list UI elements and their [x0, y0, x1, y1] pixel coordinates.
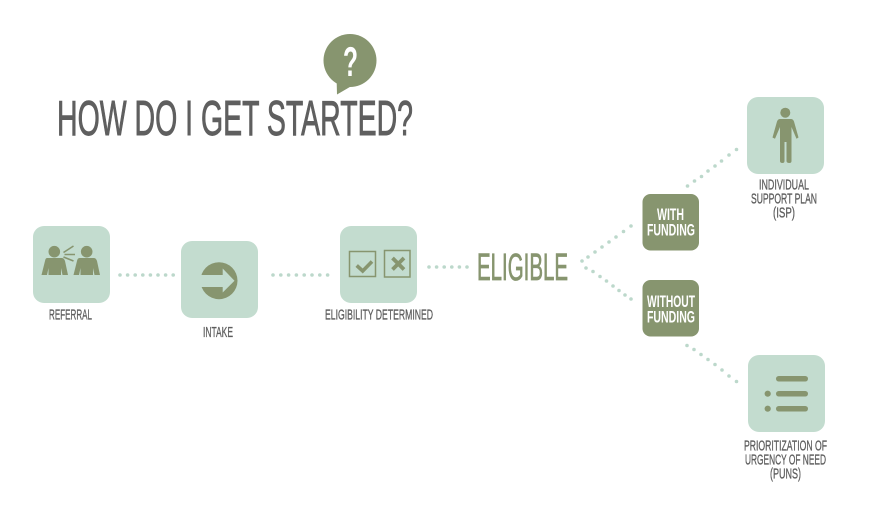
label: individual support plan: (ISP) [773, 206, 795, 222]
dotted connector: intake to eligibility [271, 273, 329, 277]
step: eligibility determined [325, 226, 433, 324]
dotted connector: referral to intake [118, 273, 175, 277]
title: HOW DO I GET STARTED? [57, 92, 413, 146]
label: individual support plan: INDIVIDUAL [759, 178, 809, 194]
step: individual support plan [747, 97, 824, 222]
box: without funding: FUNDING [647, 308, 695, 326]
step: prioritization of urgency of need [744, 355, 827, 482]
icon: question speech bubble: ? [343, 38, 358, 85]
icon: two people talking [42, 246, 100, 275]
icon: check box and cross box [350, 250, 410, 277]
step: referral [33, 226, 110, 324]
box: with funding: WITH [657, 206, 684, 224]
dotted connector: eligible to with funding [580, 224, 633, 263]
label: intake: INTAKE [203, 325, 233, 341]
heading: eligible: ELIGIBLE [477, 247, 568, 289]
label: individual support plan: SUPPORT PLAN [751, 192, 817, 208]
box: with funding: FUNDING [647, 222, 695, 240]
dotted connector: without funding to PUNS [685, 344, 738, 383]
label: prioritization of urgency of need [744, 438, 827, 482]
dotted connector: with funding to ISP [686, 148, 738, 188]
label: referral: REFERRAL [49, 308, 92, 324]
dotted connector: eligible to without funding [584, 266, 633, 301]
box: without funding: WITHOUT [647, 293, 695, 311]
icon: arrow in circle [200, 262, 238, 299]
icon: list [765, 376, 808, 412]
label: individual support plan [751, 178, 817, 222]
icon: person [772, 108, 798, 163]
label: eligibility determined: ELIGIBILITY DETERMINED [325, 308, 433, 324]
box: without funding [642, 280, 699, 336]
step: intake [181, 241, 258, 341]
icon: question speech bubble [324, 34, 376, 94]
box: with funding [642, 194, 699, 250]
dotted connector: eligibility to eligible [427, 265, 469, 269]
label: prioritization of urgency of need: (PUNS) [770, 466, 801, 482]
